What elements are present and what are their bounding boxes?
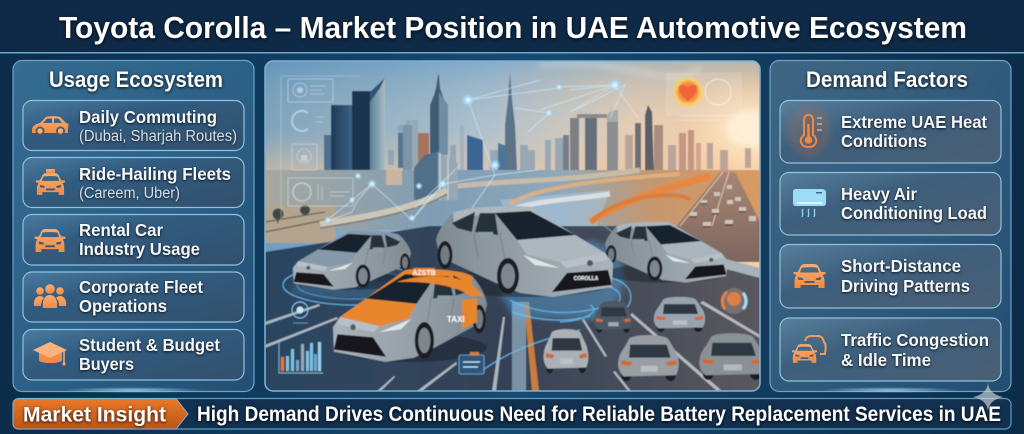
card text: Heavy Air — [841, 184, 917, 204]
icon: two cars — [792, 336, 826, 363]
bar chart hologram — [279, 340, 323, 373]
card: ride-hailing fleets — [23, 158, 244, 208]
insight label badge: Market Insight — [23, 402, 166, 426]
icon: people — [34, 284, 66, 308]
card: student buyers: Buyers — [79, 354, 134, 374]
card: rental car: Industry Usage — [79, 239, 200, 259]
card text: Daily Commuting — [79, 107, 217, 127]
trees — [272, 205, 310, 223]
card text: Extreme UAE Heat — [841, 112, 987, 132]
card text: Rental Car — [79, 220, 163, 240]
right far car — [605, 222, 727, 283]
central car — [436, 206, 613, 297]
heading: demand factors: Demand Factors — [806, 67, 968, 92]
card: short distance — [780, 244, 1001, 308]
icon: thermometer — [801, 115, 822, 147]
skyline: distant buildings — [388, 120, 564, 170]
card: daily commuting — [23, 100, 244, 150]
skyline: towers left — [324, 74, 506, 171]
panel: central illustration of Corollas on UAE roads — [266, 62, 760, 390]
taxi car: AZSTB — [412, 270, 436, 277]
insight label badge — [13, 398, 188, 429]
sparkle watermark — [973, 383, 1003, 411]
card: corporate fleet — [23, 272, 244, 322]
heading: usage ecosystem: Usage Ecosystem — [49, 67, 223, 92]
panel: demand factors — [770, 60, 1011, 393]
foreground road — [265, 226, 760, 391]
title banner — [0, 0, 1024, 54]
overpass roads — [320, 170, 710, 228]
card: extreme heat — [780, 100, 1001, 163]
battery badge hologram — [459, 352, 484, 374]
blue light trails around cars — [282, 221, 632, 372]
card: corporate fleet: Operations — [79, 296, 167, 316]
card: student buyers — [23, 330, 244, 380]
illustration frame — [265, 61, 760, 391]
lane markings — [265, 301, 760, 391]
card: rental car — [23, 214, 244, 265]
small cars in traffic — [544, 297, 765, 381]
network nodes and lines — [324, 78, 638, 224]
card: short distance: Driving Patterns — [841, 276, 970, 296]
gauge hologram right — [721, 288, 747, 314]
card text: Traffic Congestion — [841, 330, 989, 350]
skyline: Burj tower — [505, 72, 517, 170]
icon: air conditioner — [793, 189, 826, 217]
card: air conditioning — [780, 172, 1001, 235]
icon: car front — [794, 264, 826, 288]
icon: taxi — [36, 169, 65, 195]
card: ride-hailing fleets: (Careem, Uber) — [79, 185, 180, 202]
taxi car: TAXI — [447, 315, 465, 324]
card text: Corporate Fleet — [79, 277, 203, 297]
card: traffic congestion — [780, 318, 1001, 381]
heat gauge hologram — [667, 73, 741, 120]
icon: graduation cap — [33, 342, 67, 366]
card: air conditioning: Conditioning Load — [841, 203, 987, 223]
icon: car side — [32, 116, 68, 136]
insight bar — [13, 398, 1011, 429]
left car — [293, 231, 411, 290]
card: daily commuting: (Dubai, Sharjah Routes) — [79, 128, 237, 145]
card text: Student & Budget — [79, 335, 220, 355]
card: extreme heat: Conditions — [841, 131, 927, 151]
location badge hologram — [292, 302, 308, 323]
icon: rental car — [35, 229, 65, 252]
title: Toyota Corolla – Market Position in UAE Automotive Ecosystem — [59, 10, 967, 45]
ground and far highway — [265, 170, 760, 230]
holographic data panel left — [281, 76, 360, 220]
mid-ground building — [437, 152, 458, 200]
central car: COROLLA — [574, 276, 599, 282]
panel: usage ecosystem — [13, 60, 254, 393]
far highway with traffic — [670, 172, 760, 262]
card text: Short-Distance — [841, 256, 961, 276]
card text: Ride-Hailing Fleets — [79, 164, 231, 184]
taxi car — [333, 268, 487, 362]
card: traffic congestion: & Idle Time — [841, 350, 931, 370]
skyline: towers right — [563, 105, 701, 176]
